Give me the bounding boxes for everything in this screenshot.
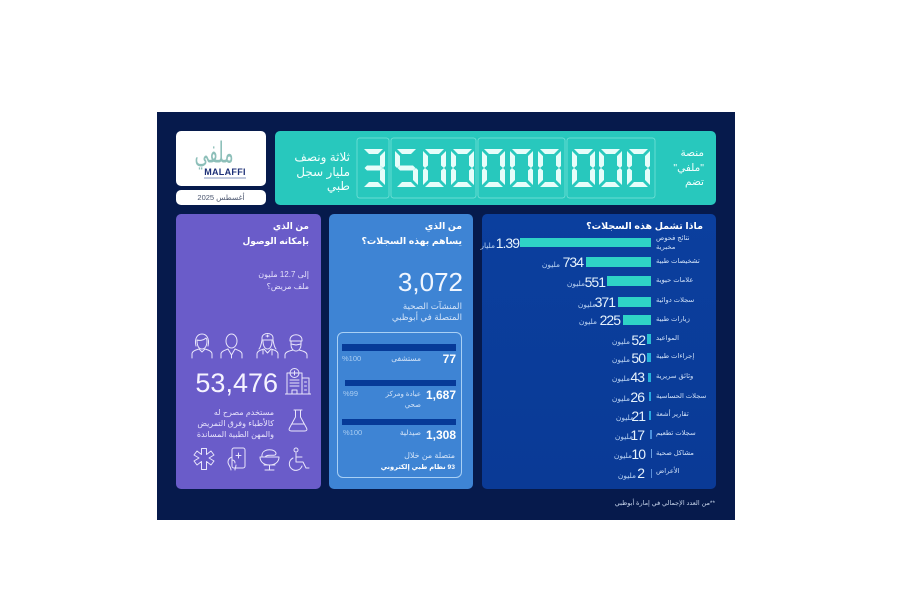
logo arabic wordmark: ملفي: [194, 136, 234, 170]
icon: medical star: [194, 448, 214, 470]
stat: 3,072 facilities: 3,072: [398, 267, 463, 297]
counter caption right: منصة: [680, 147, 704, 159]
stat: clinics 1,687: 1,687: [426, 388, 456, 402]
row labels: سجلات الحساسية: [656, 393, 706, 400]
row values: مليار: [480, 241, 495, 250]
text: licensed users description: [197, 408, 274, 440]
icon: surgeon with mask: [284, 334, 308, 358]
counter caption right: تضم: [685, 176, 704, 188]
icon: lab flask: [288, 410, 308, 432]
text: facilities description: المنشآت الصحية: [403, 301, 462, 311]
icon: male doctor: [220, 334, 242, 358]
row values: 1.39: [496, 235, 519, 251]
row labels: المواعيد: [656, 335, 679, 342]
row labels: سجلات تطعيم: [656, 430, 696, 437]
footnote: **من العدد الإجمالي في إمارة أبوظبي: [615, 500, 715, 507]
row values: مليون: [567, 279, 585, 288]
row values: 26: [630, 389, 644, 405]
heading: what records include: ماذا تشمل هذه السجلات؟: [586, 221, 703, 232]
heading: who contributes: يساهم بهذه السجلات؟: [362, 236, 462, 246]
counter caption left: مليار سجل: [296, 164, 350, 178]
row values: 17: [630, 427, 644, 443]
row values: 10: [631, 446, 645, 462]
progress bar: hospitals: [342, 344, 456, 351]
row labels: مخبرية: [656, 244, 675, 250]
text: facilities description: [392, 301, 462, 322]
text: connected through 93 systems: 93 نظام طبي إلكتروني: [381, 464, 455, 470]
logo latin wordmark: MALAFFI: [204, 167, 246, 177]
row values: 50: [631, 350, 645, 366]
stat: hospitals 77: 77: [443, 352, 456, 366]
text: connected through 93 systems: [381, 451, 455, 471]
icon: bowl of hygieia: [260, 449, 280, 470]
row values: 371: [595, 294, 615, 310]
row values: 551: [585, 274, 605, 290]
row labels: علامات حيوية: [656, 277, 693, 284]
row values: مليون: [578, 300, 596, 309]
row labels: تشخيصات طبية: [656, 258, 700, 265]
row values: مليون: [612, 337, 630, 346]
progress bar: clinics: [345, 380, 456, 386]
row labels: نتائج فحوص: [656, 235, 690, 242]
text: facilities description: المتصلة في أبوظبي: [392, 312, 462, 322]
counter caption left: [294, 150, 350, 193]
heading: who contributes: من الذي: [425, 221, 462, 231]
icon: hospital building: [285, 368, 311, 394]
text: patient files: إلى 12.7 مليون: [258, 270, 309, 279]
percent: clinics: %99: [343, 389, 358, 398]
panel: who contributes: [329, 214, 473, 489]
text: patient files: [258, 270, 309, 292]
heading: who contributes: [362, 221, 462, 246]
heading: who can access: بإمكانه الوصول: [242, 236, 309, 246]
text: patient files: ملف مريض؟: [267, 282, 309, 290]
row labels: سجلات دوائية: [656, 297, 694, 304]
progress bar: pharmacies: [342, 419, 456, 425]
text: licensed users description: مستخدم مصرح له: [214, 408, 274, 417]
icon: wheelchair user: [288, 448, 310, 471]
text: licensed users description: كالأطباء وفرق التمريض: [197, 419, 274, 428]
panel: what records include: [482, 214, 716, 489]
row values: 21: [631, 408, 645, 424]
row labels: الأعراض: [656, 468, 680, 475]
digit counter 3,500,000,000: [356, 138, 656, 198]
row values: 734: [563, 254, 583, 270]
label: clinics: عيادة ومركز: [386, 391, 421, 398]
percent: hospitals: %100: [342, 354, 361, 363]
logo tagline: [204, 177, 246, 178]
label: clinics: صحي: [405, 402, 421, 409]
text: licensed users description: والمهن الطبية المساندة: [197, 430, 274, 439]
row values: مليون: [579, 317, 597, 326]
counter caption right: [673, 147, 704, 188]
row values: مليون: [612, 374, 630, 383]
row values: مليون: [618, 471, 636, 480]
heading: who can access: [242, 221, 309, 246]
date pill: أغسطس 2025: [197, 193, 245, 202]
bar chart: record types: [520, 238, 652, 478]
label: pharmacies: صيدلية: [400, 428, 421, 437]
row values: 43: [630, 369, 644, 385]
heading: who can access: من الذي: [273, 221, 309, 231]
row values: مليون: [612, 394, 630, 403]
row labels: وثائق سريرية: [656, 373, 693, 380]
panel: who can access: [176, 214, 321, 489]
counter caption left: ثلاثة ونصف: [294, 150, 350, 164]
label: hospitals: مستشفى: [391, 354, 421, 363]
icon: nurse with stethoscope: [256, 333, 278, 358]
row values: مليون: [614, 451, 632, 460]
row values: مليون: [616, 413, 634, 422]
teal counter band: [275, 131, 716, 205]
inner facilities box: [337, 332, 462, 478]
row values: مليون: [542, 260, 560, 269]
dark background panel: [157, 112, 735, 520]
text: connected through 93 systems: متصلة من خلال: [404, 451, 455, 460]
stat: pharmacies 1,308: 1,308: [426, 428, 456, 442]
row values: مليون: [612, 355, 630, 364]
icon: hand with phone: [228, 448, 246, 470]
row values: مليون: [615, 432, 633, 441]
row labels: إجراءات طبية: [656, 353, 694, 360]
percent: pharmacies: %100: [343, 428, 362, 437]
date pill: [176, 190, 266, 205]
row values: 52: [631, 332, 645, 348]
label: clinics: [385, 390, 421, 409]
row values: 225: [600, 312, 620, 328]
counter caption left: طبي: [327, 179, 350, 193]
row values: 2: [637, 465, 644, 481]
row labels: زيارات طبية: [656, 316, 690, 323]
stat: 53,476 users: 53,476: [195, 368, 278, 398]
row labels: مشاكل صحية: [656, 450, 694, 457]
logo card: [176, 131, 266, 186]
icon: woman clinician: [192, 334, 212, 358]
row labels: تقارير أشعة: [656, 411, 689, 418]
counter caption right: "ملفي": [673, 162, 704, 174]
